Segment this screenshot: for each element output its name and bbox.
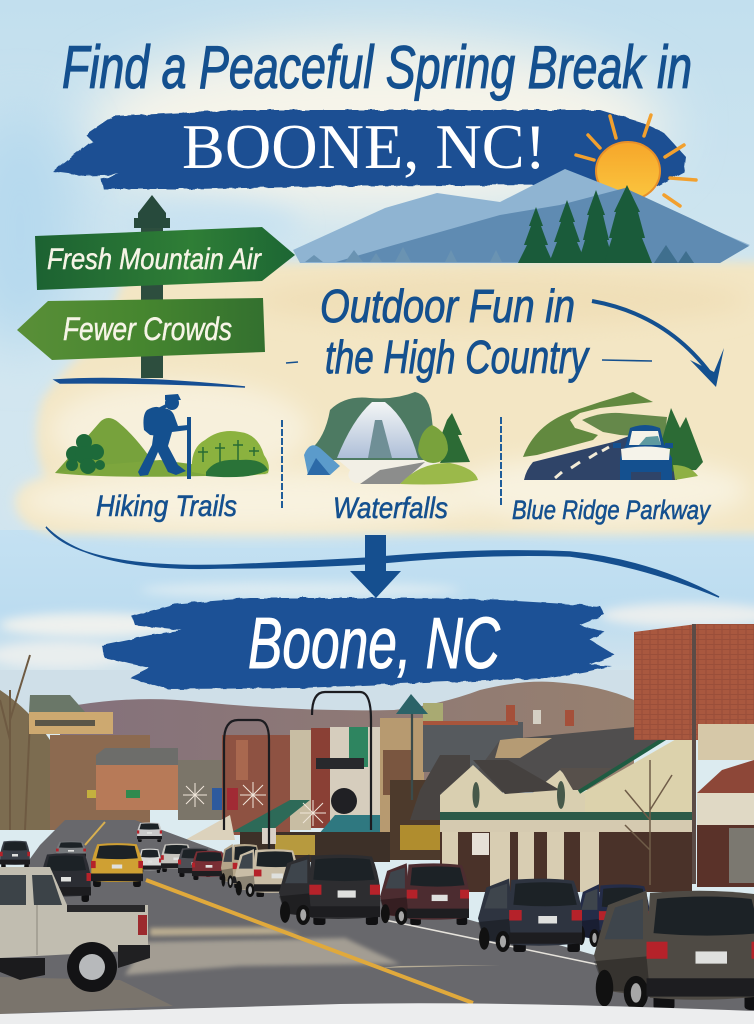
icon: blue ridge parkway [523, 392, 703, 480]
photo: red brick building [634, 624, 754, 887]
photo: beige shopping building [390, 722, 692, 892]
labels: Waterfalls [333, 492, 448, 525]
divider [500, 417, 502, 505]
icon: waterfalls [304, 392, 478, 484]
arrow: curved down right [592, 301, 724, 387]
banner: Boone, NC!: BOONE, NC! [182, 112, 546, 182]
banner: Boone, NC! [53, 110, 686, 190]
photo: road surface [0, 820, 754, 1024]
photo: parked cars [0, 822, 754, 1010]
divider [281, 420, 283, 510]
arrow: curved flourish and down arrow [46, 527, 719, 598]
sign: fresh mountain air [35, 227, 295, 290]
labels: Hiking Trails [96, 490, 237, 523]
icon: sun [576, 115, 696, 206]
photo: silver pickup truck [0, 867, 150, 992]
photo: street lamps [224, 692, 428, 850]
labels: Blue Ridge Parkway [512, 495, 711, 525]
street photo [0, 624, 754, 1024]
photo: centre storefronts [183, 703, 574, 862]
icon: hiking trails [55, 394, 269, 479]
labels [96, 490, 711, 525]
background: watercolor sky and parchment [0, 0, 754, 710]
photo: left town buildings [0, 655, 222, 830]
banner: Boone, NC script [101, 598, 615, 689]
photo: distant hills [60, 682, 634, 790]
heading: outdoor fun: Outdoor Fun in [320, 280, 575, 332]
brush underline [55, 379, 245, 387]
banner: Boone, NC script: Boone, NC [248, 604, 501, 684]
heading: outdoor fun [286, 280, 652, 383]
heading: outdoor fun: the High Country [325, 331, 590, 383]
photo: sky above town [0, 670, 754, 730]
signpost [35, 195, 295, 378]
sign: fewer crowds [17, 298, 265, 360]
bottom paper edge [0, 1003, 754, 1024]
illustration: mountains and pines [293, 169, 750, 263]
sign: fresh mountain air: Fresh Mountain Air [47, 243, 262, 276]
sign: fewer crowds: Fewer Crowds [63, 311, 232, 347]
